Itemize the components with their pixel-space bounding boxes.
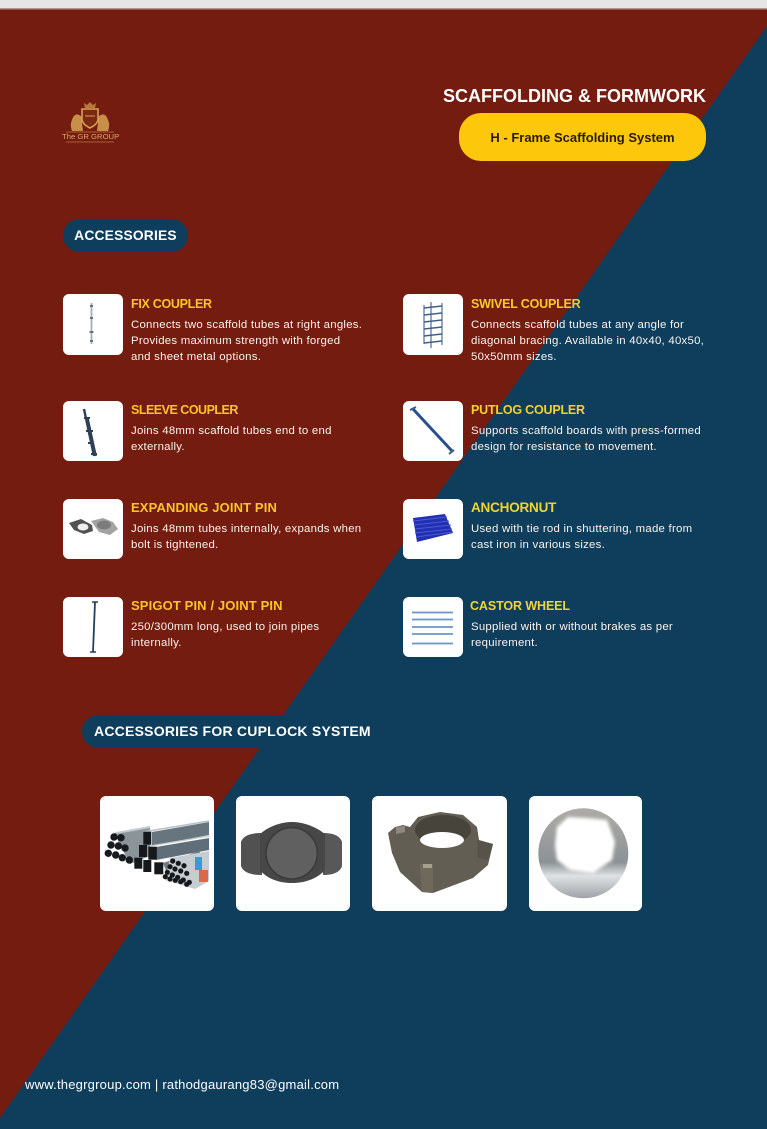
- footer contact: www.thegrgroup.com | rathodgaurang83@gmail.com: [25, 1077, 339, 1092]
- heading: accessories for cuplock system: [82, 715, 372, 748]
- item: expanding joint pin: Joins 48mm tubes internally, expands when: [131, 523, 361, 535]
- heading: accessories: [63, 219, 188, 252]
- photo: cup casting: [372, 796, 507, 911]
- icon: putlog coupler: [403, 401, 463, 461]
- icon: anchor nut: [403, 499, 463, 559]
- item: expanding joint pin: bolt is tightened.: [131, 539, 218, 551]
- item: putlog coupler: Supports scaffold boards with press-formed: [471, 425, 701, 437]
- item: anchor nut: cast iron in various sizes.: [471, 539, 605, 551]
- item: putlog coupler: PUTLOG COUPLER: [471, 403, 585, 417]
- heading: accessories for cuplock system: ACCESSORIES FOR CUPLOCK SYSTEM: [94, 723, 371, 739]
- item: spigot pin: 250/300mm long, used to join pipes: [131, 621, 319, 633]
- item: putlog coupler: [471, 403, 701, 453]
- item: fix coupler: and sheet metal options.: [131, 351, 261, 363]
- logo: The GR Group: The GR GROUP: [62, 132, 119, 141]
- item: swivel coupler: SWIVEL COUPLER: [471, 297, 580, 311]
- item: fix coupler: [131, 297, 362, 363]
- icon: castor wheel: [403, 597, 463, 657]
- item: swivel coupler: 50x50mm sizes.: [471, 351, 557, 363]
- item: swivel coupler: diagonal bracing. Available in 40x40, 40x50,: [471, 335, 704, 347]
- item: castor wheel: Supplied with or without brakes as per: [471, 621, 673, 633]
- heading: accessories: ACCESSORIES: [74, 228, 177, 243]
- item: fix coupler: Provides maximum strength with forged: [131, 335, 340, 347]
- item: spigot pin: [131, 598, 319, 649]
- item: sleeve coupler: Joins 48mm scaffold tubes end to end: [131, 425, 332, 437]
- item: anchor nut: Used with tie rod in shuttering, made from: [471, 523, 692, 535]
- photo: forged coupler part: [236, 796, 350, 911]
- icon: fix coupler: [63, 294, 123, 355]
- icon: spigot pin: [63, 597, 123, 657]
- icon: expanding joint pin: [63, 499, 123, 559]
- item: swivel coupler: Connects scaffold tubes at any angle for: [471, 319, 684, 331]
- item: anchor nut: ANCHORNUT: [471, 500, 556, 515]
- icon: swivel coupler: [403, 294, 463, 355]
- item: castor wheel: [470, 599, 673, 649]
- item: sleeve coupler: [131, 403, 332, 453]
- item: swivel coupler: [471, 297, 704, 363]
- item: castor wheel: requirement.: [471, 637, 538, 649]
- photo: tubes: [100, 796, 214, 911]
- subtitle badge: H - Frame Scaffolding System: [490, 130, 675, 145]
- logo: The GR Group: [62, 102, 119, 142]
- item: expanding joint pin: EXPANDING JOINT PIN: [131, 500, 277, 515]
- item: sleeve coupler: externally.: [131, 441, 185, 453]
- item: castor wheel: CASTOR WHEEL: [470, 599, 570, 613]
- item: expanding joint pin: [131, 500, 361, 551]
- title: SCAFFOLDING & FORMWORK: [443, 86, 706, 106]
- item: fix coupler: FIX COUPLER: [131, 297, 212, 311]
- item: spigot pin: internally.: [131, 637, 182, 649]
- subtitle badge: [459, 113, 706, 161]
- icon: sleeve coupler: [63, 401, 123, 461]
- item: anchor nut: [471, 500, 692, 551]
- photo: steel bowl: [529, 796, 642, 911]
- item: fix coupler: Connects two scaffold tubes at right angles.: [131, 319, 362, 331]
- item: sleeve coupler: SLEEVE COUPLER: [131, 403, 238, 417]
- item: putlog coupler: design for resistance to movement.: [471, 441, 657, 453]
- item: spigot pin: SPIGOT PIN / JOINT PIN: [131, 598, 283, 613]
